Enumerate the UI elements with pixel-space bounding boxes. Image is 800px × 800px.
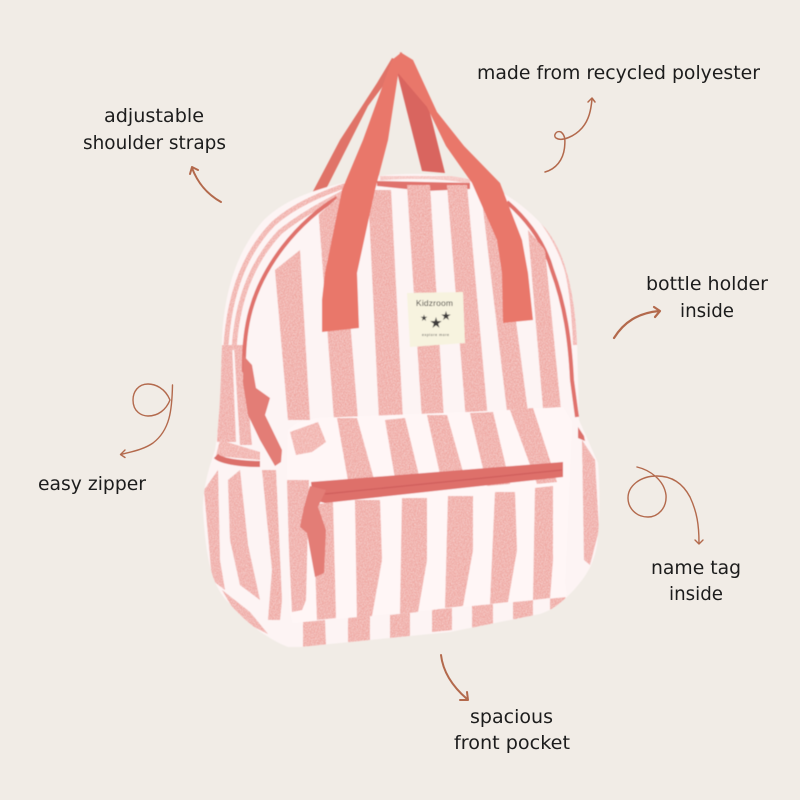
pocket stripes xyxy=(287,408,557,620)
brand name: Kidzroom xyxy=(416,298,453,308)
brand label xyxy=(407,292,465,347)
front panel stripes xyxy=(275,185,562,420)
arrow: easy zipper xyxy=(120,384,172,458)
zipper teeth xyxy=(325,470,562,494)
label: spacious front pocket xyxy=(454,706,570,754)
right side elastic band xyxy=(578,427,585,441)
main zipper trim xyxy=(244,181,577,417)
main zipper puller xyxy=(243,355,282,466)
side pocket elastic band xyxy=(216,456,260,464)
label: name tag inside: name tag xyxy=(651,557,741,579)
front left handle strap xyxy=(322,52,402,332)
label: name tag inside xyxy=(651,557,741,605)
label: bottle holder inside: bottle holder xyxy=(646,273,768,295)
label: adjustable shoulder straps: shoulder straps xyxy=(83,132,226,154)
label: name tag inside: inside xyxy=(669,583,723,605)
label: adjustable shoulder straps xyxy=(83,105,226,154)
arrow: bottle holder xyxy=(614,307,660,338)
back handle straps xyxy=(310,58,445,197)
arrow: shoulder straps xyxy=(190,167,221,202)
backpack body xyxy=(203,174,599,647)
arrow: name tag xyxy=(628,467,703,544)
front pocket zipper xyxy=(311,462,563,503)
front pocket xyxy=(287,407,572,623)
arrow: front pocket xyxy=(441,655,468,700)
rim stripes and side stripes xyxy=(204,176,599,647)
arrow: recycled polyester xyxy=(545,98,595,172)
label: adjustable shoulder straps: adjustable xyxy=(104,105,204,127)
front zipper puller xyxy=(300,486,326,577)
label: spacious front pocket: front pocket xyxy=(454,732,570,754)
label: bottle holder inside: inside xyxy=(680,300,734,322)
backpack xyxy=(203,52,599,647)
label: made from recycled polyester: made from recycled polyester xyxy=(477,62,760,84)
front right handle strap xyxy=(398,52,533,323)
tagline: explore more xyxy=(422,333,449,337)
label: easy zipper: easy zipper xyxy=(38,473,146,495)
label: spacious front pocket: spacious xyxy=(470,706,553,728)
stars xyxy=(421,311,451,328)
label: bottle holder inside xyxy=(646,273,768,322)
